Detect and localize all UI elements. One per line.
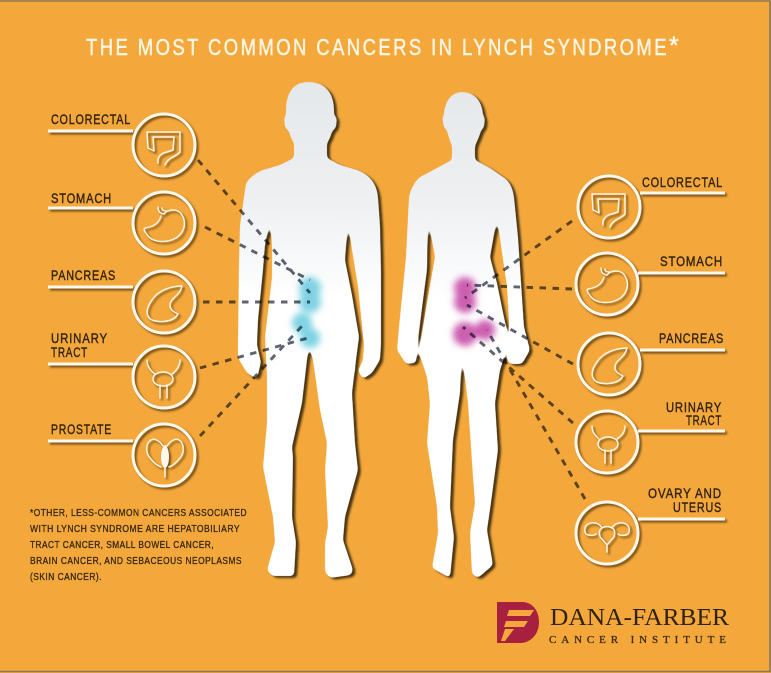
connector lines: female xyxy=(463,221,585,499)
label: URINARY xyxy=(51,330,108,346)
left: prostate xyxy=(48,421,195,486)
icon xyxy=(48,271,195,333)
connector lines: male xyxy=(198,160,310,436)
right: ovary and uterus: UTERUS xyxy=(673,499,722,515)
label: PANCREAS xyxy=(659,330,724,346)
right: urinary tract xyxy=(576,399,725,473)
icon xyxy=(578,333,725,395)
left: stomach xyxy=(48,190,195,254)
label: OVARY AND xyxy=(648,485,722,501)
right: ovary and uterus xyxy=(576,485,725,564)
icon xyxy=(578,176,725,238)
label: PROSTATE xyxy=(51,421,112,437)
label: COLORECTAL xyxy=(51,111,131,127)
hotspots: male xyxy=(292,277,321,348)
figure: male body xyxy=(238,82,381,578)
left: urinary tract xyxy=(48,330,195,408)
right: pancreas xyxy=(578,330,725,395)
right: colorectal xyxy=(578,174,725,238)
label: PANCREAS xyxy=(51,267,116,283)
subtitle: CANCER INSTITUTE xyxy=(549,634,729,646)
label: STOMACH xyxy=(660,253,723,269)
title: * xyxy=(669,32,679,60)
label: URINARY xyxy=(666,399,722,415)
icon xyxy=(48,424,195,486)
left: colorectal xyxy=(48,111,195,176)
wordmark: DANA-FARBER xyxy=(550,605,729,631)
footnote: TRACT CANCER, SMALL BOWEL CANCER, xyxy=(30,539,214,551)
left: urinary tract: TRACT xyxy=(51,344,88,360)
footnote: WITH LYNCH SYNDROME ARE HEPATOBILIARY xyxy=(30,523,240,535)
icon xyxy=(576,502,725,564)
label: COLORECTAL xyxy=(642,174,723,190)
footnote: BRAIN CANCER, AND SEBACEOUS NEOPLASMS xyxy=(30,555,242,567)
left: pancreas xyxy=(48,267,195,333)
hotspots: female xyxy=(453,277,495,346)
icon xyxy=(48,192,195,254)
footnote: (SKIN CANCER). xyxy=(30,571,102,583)
footnote: *OTHER, LESS-COMMON CANCERS ASSOCIATED xyxy=(30,507,247,519)
logo: Dana-Farber xyxy=(497,602,729,646)
label: STOMACH xyxy=(51,190,112,206)
figure: female body xyxy=(397,92,530,578)
icon xyxy=(576,411,725,473)
footnote xyxy=(30,507,247,583)
logo mark xyxy=(497,602,539,643)
icon xyxy=(576,253,725,315)
icon xyxy=(48,114,195,176)
right: stomach xyxy=(576,253,725,315)
icon xyxy=(48,346,195,408)
right: urinary tract: TRACT xyxy=(686,412,722,428)
